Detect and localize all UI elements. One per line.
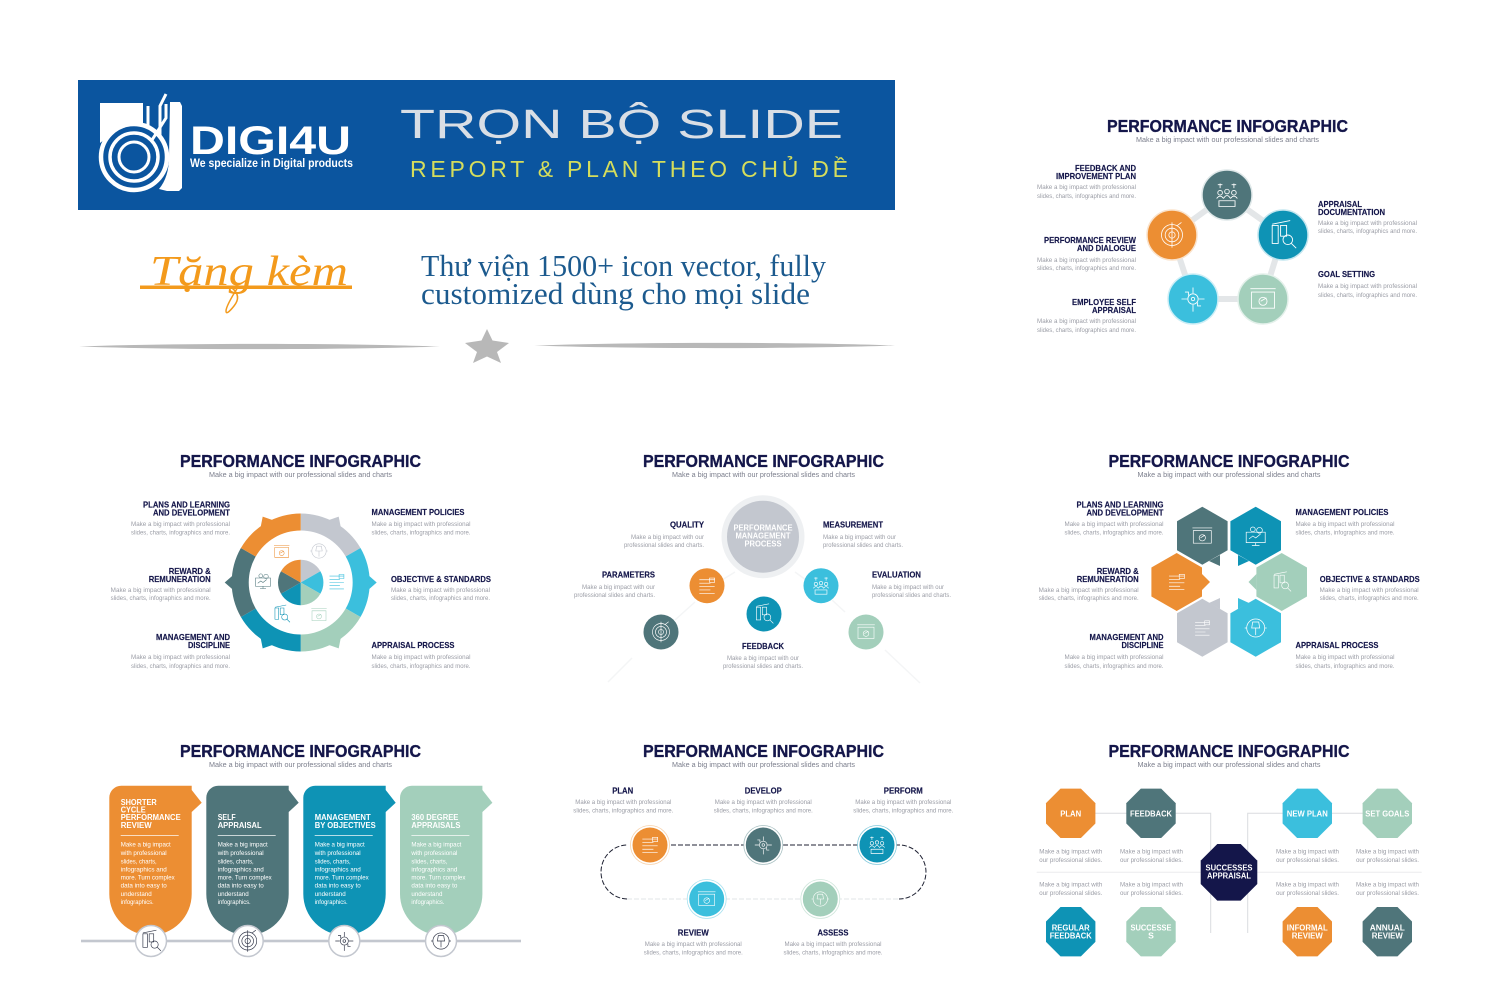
card: self appraisal: more. Turn complex [218, 875, 273, 882]
pentagon connector [1172, 195, 1283, 299]
octagon: new plan [1283, 789, 1332, 838]
label: plan: slides, charts, infographics and more. [573, 809, 674, 815]
label: appraisal documentation: DOCUMENTATION [1318, 207, 1385, 217]
label: goal setting: GOAL SETTING [1318, 269, 1375, 279]
central process circle: MANAGEMENT [736, 530, 791, 540]
octagon captions: Make a big impact with [1276, 883, 1339, 889]
label: develop: DEVELOP [745, 786, 782, 796]
octagon captions: Make a big impact with [1120, 850, 1183, 856]
octagon: regular feedback: REGULAR [1052, 923, 1090, 933]
title: PERFORMANCE INFOGRAPHIC [643, 741, 884, 761]
octagon captions: our professional slides. [1356, 891, 1419, 897]
subtitle: Make a big impact with our professional slides and charts [672, 762, 856, 769]
label: appraisal process: APPRAISAL PROCESS [372, 640, 455, 650]
bonus description: Thư viện 1500+ icon vector, fully [421, 248, 826, 283]
ring icons [256, 544, 344, 622]
label: objective and standards [1320, 574, 1420, 602]
subtitle: Make a big impact with our professional slides and charts [1138, 472, 1321, 479]
title: PERFORMANCE INFOGRAPHIC [1107, 116, 1348, 136]
card: management by objectives: with professional [314, 850, 361, 857]
label: employee self appraisal: EMPLOYEE SELF [1072, 297, 1136, 307]
panel: pentagon cycle [1037, 116, 1417, 334]
bonus script label: Tặng kèm [150, 249, 348, 295]
card: self appraisal: APPRAISAL [218, 820, 262, 830]
hexagons with icons [1151, 507, 1307, 657]
label: quality: Make a big impact with our [631, 535, 704, 541]
label: feedback: FEEDBACK [742, 641, 784, 651]
octagon captions: our professional slides. [1120, 891, 1183, 897]
card: management by objectives: infographics and [315, 867, 361, 874]
ring chart [225, 513, 377, 652]
label: plans and learning: slides, charts, infographics and more. [1064, 530, 1164, 536]
card: shorter cycle performance review: PERFORMANCE [121, 812, 181, 822]
label: assess: slides, charts, infographics and more. [784, 950, 883, 956]
octagon captions: Make a big impact with [1039, 883, 1102, 889]
label: review: REVIEW [678, 928, 709, 938]
label: appraisal documentation: Make a big impact with professional [1318, 221, 1417, 227]
banner subheading: REPORT & PLAN THEO CHỦ ĐỀ [410, 154, 848, 182]
card: shorter cycle performance review: infographics. [121, 899, 154, 906]
label: management and discipline: DISCIPLINE [188, 640, 230, 650]
label: feedback: Make a big impact with our [727, 656, 799, 662]
card: 360 degree appraisals: infographics. [411, 899, 445, 906]
banner heading: TRỌN BỘ SLIDE [400, 101, 843, 147]
label: appraisal process [1296, 640, 1395, 670]
card: 360 degree appraisals: infographics and [411, 867, 458, 874]
central process circle: PERFORMANCE [734, 523, 793, 533]
label: quality [624, 520, 704, 549]
label: performance review and dialogue [1037, 235, 1136, 272]
faint rays [608, 572, 920, 683]
label: plans and learning: PLANS AND LEARNING [1076, 500, 1164, 510]
subtitle: Make a big impact with our professional slides and charts [209, 472, 393, 479]
label: management policies: MANAGEMENT POLICIES [372, 507, 465, 517]
label: performance review and dialogue: AND DIALOGUE [1077, 243, 1136, 253]
logo icon [100, 94, 182, 191]
card: shorter cycle performance review: understand [121, 891, 152, 898]
octagon: regular feedback [1046, 907, 1095, 956]
bonus script label [140, 249, 352, 313]
label: objective and standards: slides, charts, infographics and more. [1320, 596, 1419, 602]
label: management and discipline [131, 632, 230, 670]
label: feedback and improvement plan: Make a big impact with professional [1037, 185, 1136, 191]
label: assess: ASSESS [818, 928, 849, 938]
label: reward and remuneration: REMUNERATION [149, 574, 211, 584]
label: management and discipline: MANAGEMENT AND [1090, 632, 1164, 642]
label: parameters: Make a big impact with our [582, 585, 655, 591]
label: employee self appraisal: Make a big impact with professional [1037, 319, 1136, 325]
card: shorter cycle performance review: SHORTER [121, 797, 157, 807]
label: plans and learning: AND DEVELOPMENT [153, 508, 231, 518]
label: goal setting: Make a big impact with professional [1318, 284, 1417, 290]
label: plans and learning: Make a big impact with professional [131, 522, 230, 528]
label: appraisal documentation: slides, charts, infographics and more. [1318, 229, 1417, 235]
octagon: feedback: FEEDBACK [1130, 808, 1173, 818]
label: reward and remuneration [1039, 566, 1139, 602]
label: review: Make a big impact with professional [645, 942, 742, 948]
card: management by objectives: infographics. [315, 899, 348, 906]
label: reward and remuneration: REMUNERATION [1077, 574, 1139, 584]
label: management policies [372, 507, 471, 536]
label: performance review and dialogue: slides, charts, infographics and more. [1037, 266, 1136, 272]
central octagon: APPRAISAL [1207, 870, 1251, 880]
bonus description [421, 248, 826, 311]
label: feedback and improvement plan: FEEDBACK AND [1075, 163, 1136, 173]
label: reward and remuneration: Make a big impact with professional [111, 588, 211, 594]
octagon: plan: PLAN [1060, 808, 1081, 818]
octagon captions: our professional slides. [1039, 858, 1103, 864]
octagon captions: Make a big impact with [1039, 850, 1102, 856]
central process circle: PROCESS [744, 538, 782, 548]
label: reward and remuneration: slides, charts, infographics and more. [111, 596, 211, 602]
octagon captions: our professional slides. [1276, 858, 1339, 864]
card: 360 degree appraisals: slides, charts, [411, 858, 448, 865]
octagon: regular feedback: FEEDBACK [1050, 930, 1092, 940]
card: shorter cycle performance review: slides, charts, [121, 858, 157, 865]
label: plans and learning [1064, 500, 1164, 536]
octagon: successes: S [1148, 930, 1154, 940]
octagon captions: our professional slides. [1120, 858, 1183, 864]
label: measurement [823, 520, 903, 549]
label: management and discipline: Make a big impact with professional [1064, 655, 1164, 661]
logo tagline: We specialize in Digital products [190, 156, 353, 170]
label: appraisal process: Make a big impact with professional [1296, 655, 1394, 661]
octagon: set goals: SET GOALS [1365, 808, 1410, 818]
label: appraisal process [372, 640, 471, 670]
title: PERFORMANCE INFOGRAPHIC [180, 451, 421, 471]
subtitle: Make a big impact with our professional slides and charts [672, 472, 856, 479]
card: 360 degree appraisals [400, 786, 492, 935]
label: measurement: Make a big impact with our [823, 535, 896, 541]
label: parameters: professional slides and charts. [574, 593, 655, 599]
label: review [644, 928, 743, 956]
octagon captions: our professional slides. [1276, 891, 1339, 897]
label: objective and standards: OBJECTIVE & STANDARDS [1320, 574, 1420, 584]
panel: appraisal cards [81, 741, 521, 956]
label: goal setting [1318, 269, 1417, 299]
octagon: informal review: INFORMAL [1287, 923, 1328, 933]
label: feedback and improvement plan: slides, charts, infographics and more. [1037, 194, 1136, 200]
label: feedback [723, 641, 803, 670]
octagon: new plan: NEW PLAN [1287, 808, 1328, 818]
center pie [278, 560, 323, 605]
title: PERFORMANCE INFOGRAPHIC [1108, 451, 1350, 471]
card: management by objectives: BY OBJECTIVES [315, 820, 376, 830]
process nodes with icons [630, 826, 896, 918]
card: management by objectives: MANAGEMENT [315, 812, 371, 822]
label: appraisal documentation: APPRAISAL [1318, 199, 1362, 209]
label: objective and standards: Make a big impact with professional [1320, 588, 1419, 594]
octagon captions: our professional slides. [1039, 891, 1103, 897]
label: reward and remuneration: Make a big impact with professional [1039, 588, 1139, 594]
octagon: annual review: ANNUAL [1370, 923, 1405, 933]
label: develop: Make a big impact with professional [715, 800, 812, 806]
card: management by objectives: Make a big impact [315, 842, 365, 849]
octagon: informal review: REVIEW [1292, 930, 1324, 940]
panel: management process arc [574, 451, 951, 683]
label: goal setting: slides, charts, infographics and more. [1318, 293, 1417, 299]
card: 360 degree appraisals: data into easy to [411, 883, 458, 890]
card: self appraisal: data into easy to [218, 883, 264, 890]
label: feedback: professional slides and charts. [723, 664, 803, 670]
arc circle nodes with icons [644, 568, 884, 650]
label: management policies [1296, 507, 1395, 536]
central octagon: SUCCESSES [1206, 862, 1253, 872]
label: objective and standards: OBJECTIVE & STANDARDS [391, 574, 491, 584]
card: self appraisal: slides, charts, [218, 858, 254, 865]
label: develop: slides, charts, infographics and more. [714, 809, 813, 815]
card: 360 degree appraisals: with professional [410, 850, 457, 857]
label: measurement: professional slides and charts. [823, 543, 903, 549]
octagon: set goals [1363, 789, 1412, 838]
title: PERFORMANCE INFOGRAPHIC [180, 741, 421, 761]
label: performance review and dialogue: PERFORMANCE REVIEW [1044, 235, 1136, 245]
label: employee self appraisal: APPRAISAL [1092, 305, 1136, 315]
label: plans and learning: PLANS AND LEARNING [143, 500, 230, 510]
timeline icon circles [136, 926, 456, 956]
label: plan [573, 786, 674, 815]
octagon captions: Make a big impact with [1356, 883, 1419, 889]
label: evaluation: Make a big impact with our [872, 585, 944, 591]
label: objective and standards: slides, charts, infographics and more. [391, 596, 490, 602]
octagon captions: Make a big impact with [1356, 850, 1419, 856]
card: management by objectives: understand [315, 891, 346, 898]
label: management and discipline: slides, charts, infographics and more. [1064, 664, 1164, 670]
label: management and discipline: MANAGEMENT AND [156, 632, 230, 642]
label: plans and learning [131, 500, 231, 536]
label: management and discipline: DISCIPLINE [1122, 640, 1164, 650]
panel: hexagon cluster [1039, 451, 1420, 670]
label: management and discipline: slides, charts, infographics and more. [131, 664, 230, 670]
label: management and discipline: Make a big impact with professional [131, 655, 230, 661]
label: assess [784, 928, 883, 956]
card: self appraisal: with professional [217, 850, 264, 857]
label: management policies: slides, charts, infographics and more. [372, 530, 471, 536]
card: self appraisal [206, 786, 299, 935]
label: plans and learning: Make a big impact with professional [1064, 522, 1164, 528]
label: parameters: PARAMETERS [602, 570, 655, 580]
label: employee self appraisal: slides, charts, infographics and more. [1037, 328, 1136, 334]
label: plans and learning: slides, charts, infographics and more. [131, 530, 230, 536]
card: shorter cycle performance review [109, 786, 202, 935]
label: develop [714, 786, 813, 815]
card: shorter cycle performance review: more. Turn complex [121, 875, 176, 882]
label: measurement: MEASUREMENT [823, 520, 884, 530]
label: management policies: Make a big impact with professional [1296, 522, 1394, 528]
central process circle [722, 495, 804, 578]
octagon: successes [1126, 907, 1176, 956]
label: appraisal process: slides, charts, infographics and more. [1296, 664, 1395, 670]
panel: dashed process loop [573, 741, 954, 956]
card: self appraisal: SELF [218, 812, 236, 822]
label: plans and learning: AND DEVELOPMENT [1086, 508, 1164, 518]
panel: segmented ring [111, 451, 491, 670]
card: 360 degree appraisals: understand [411, 891, 443, 898]
label: perform: PERFORM [884, 786, 923, 796]
timeline [81, 940, 521, 942]
octagon: annual review [1363, 907, 1412, 956]
label: evaluation [872, 570, 951, 599]
card: shorter cycle performance review: CYCLE [121, 804, 146, 814]
octagon captions: Make a big impact with [1120, 883, 1183, 889]
label: appraisal process: APPRAISAL PROCESS [1296, 640, 1379, 650]
label: objective and standards [391, 574, 491, 602]
card: self appraisal: infographics and [218, 867, 264, 874]
octagon: informal review [1283, 907, 1332, 956]
card: self appraisal: understand [218, 891, 249, 898]
card: self appraisal: Make a big impact [218, 842, 268, 849]
card: management by objectives: data into easy to [315, 883, 361, 890]
circle nodes with icons [1147, 170, 1308, 324]
card: self appraisal: infographics. [218, 899, 251, 906]
label: management and discipline [1064, 632, 1164, 670]
label: perform [853, 786, 954, 815]
label: parameters [574, 570, 655, 599]
title: PERFORMANCE INFOGRAPHIC [1108, 741, 1350, 761]
logo wordmark: DIGI4U [190, 119, 351, 163]
subtitle: Make a big impact with our professional slides and charts [209, 762, 393, 769]
label: reward and remuneration: REWARD & [169, 566, 211, 576]
card: shorter cycle performance review: infographics and [121, 867, 167, 874]
label: appraisal process: Make a big impact with professional [372, 655, 470, 661]
label: reward and remuneration: REWARD & [1097, 566, 1139, 576]
card: shorter cycle performance review: Make a big impact [121, 842, 171, 849]
label: feedback and improvement plan [1037, 163, 1136, 200]
label: quality: professional slides and charts. [624, 543, 704, 549]
label: management policies: MANAGEMENT POLICIES [1296, 507, 1389, 517]
octagon: feedback [1126, 789, 1176, 838]
card: 360 degree appraisals: APPRAISALS [411, 820, 461, 830]
octagon captions: our professional slides. [1356, 858, 1419, 864]
card: shorter cycle performance review: with professional [120, 850, 167, 857]
label: management policies: slides, charts, infographics and more. [1296, 530, 1395, 536]
dashed loop path [601, 845, 926, 899]
octagon captions: Make a big impact with [1276, 850, 1339, 856]
label: objective and standards: Make a big impact with professional [391, 588, 490, 594]
octagon: plan [1046, 789, 1095, 838]
label: plan: PLAN [612, 786, 633, 796]
label: reward and remuneration [111, 566, 211, 602]
title: PERFORMANCE INFOGRAPHIC [643, 451, 884, 471]
subtitle: Make a big impact with our professional slides and charts [1136, 137, 1320, 144]
label: management policies: Make a big impact with professional [372, 522, 470, 528]
label: evaluation: EVALUATION [872, 570, 921, 580]
card: management by objectives: more. Turn complex [315, 875, 370, 882]
card: management by objectives: slides, charts, [315, 858, 351, 865]
card: management by objectives [303, 786, 396, 935]
card: 360 degree appraisals: 360 DEGREE [411, 812, 459, 822]
card: 360 degree appraisals: more. Turn complex [411, 875, 466, 882]
label: appraisal process: slides, charts, infographics and more. [372, 664, 471, 670]
label: performance review and dialogue: Make a big impact with professional [1037, 258, 1136, 264]
label: perform: Make a big impact with professional [855, 800, 951, 806]
banner [78, 80, 895, 210]
label: employee self appraisal [1037, 297, 1136, 334]
label: assess: Make a big impact with professional [784, 942, 882, 948]
label: review: slides, charts, infographics and more. [644, 950, 743, 956]
label: appraisal documentation [1318, 199, 1417, 235]
panel: octagon network [1037, 741, 1422, 956]
connector lines [1037, 813, 1422, 933]
label: reward and remuneration: slides, charts, infographics and more. [1039, 596, 1139, 602]
bonus description: customized dùng cho mọi slide [421, 276, 810, 311]
card: shorter cycle performance review: data into easy to [121, 883, 167, 890]
subtitle: Make a big impact with our professional slides and charts [1138, 762, 1321, 769]
label: evaluation: professional slides and charts. [872, 593, 951, 599]
card: 360 degree appraisals: Make a big impact [411, 842, 462, 849]
central octagon [1201, 844, 1257, 901]
card: shorter cycle performance review: REVIEW [121, 820, 153, 830]
label: plan: Make a big impact with professional [575, 800, 671, 806]
octagon captions [1039, 850, 1419, 897]
label: feedback and improvement plan: IMPROVEMENT PLAN [1056, 171, 1136, 181]
octagon: successes: SUCCESSE [1130, 923, 1172, 933]
octagon: annual review: REVIEW [1372, 930, 1404, 940]
label: quality: QUALITY [670, 520, 704, 530]
star divider [79, 329, 895, 363]
label: perform: slides, charts, infographics and more. [853, 809, 954, 815]
